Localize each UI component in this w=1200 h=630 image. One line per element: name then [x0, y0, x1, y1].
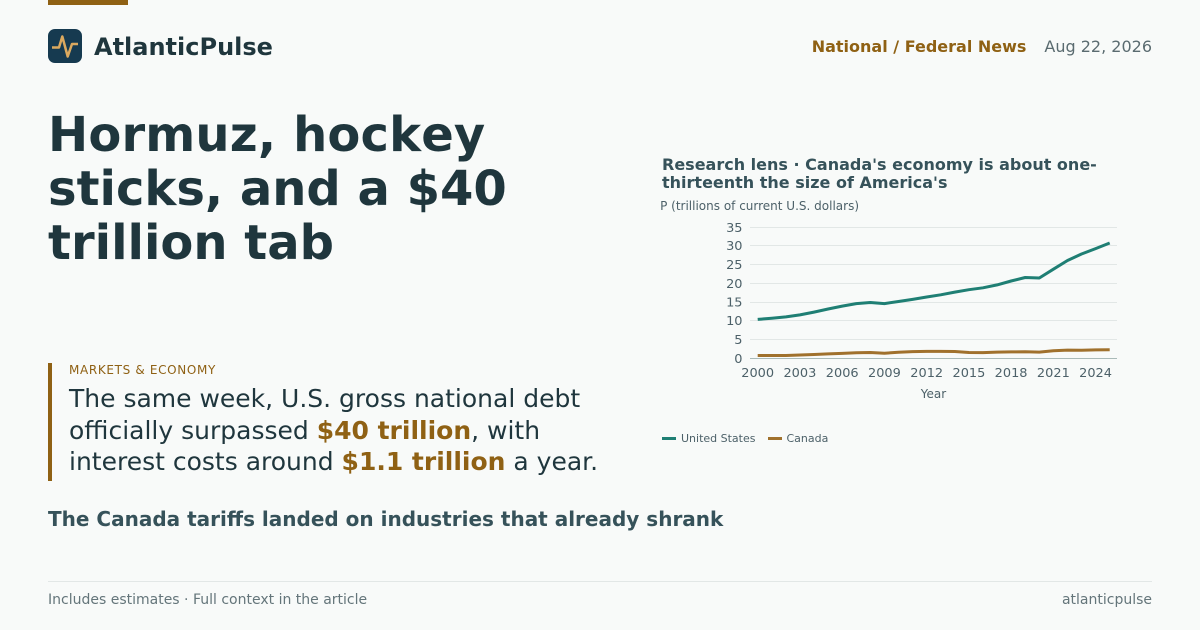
legend item: Canada [768, 432, 828, 445]
main headline: Hormuz, hockey [48, 107, 485, 163]
chart title: thirteenth the size of America's [662, 172, 947, 192]
x axis labels: 2018 [995, 365, 1028, 380]
x axis labels: 2009 [868, 365, 901, 380]
callout text: interest costs around $1.1 trillion a year. [69, 447, 598, 476]
brand logo icon [48, 29, 82, 63]
y axis labels: 35 [726, 220, 742, 235]
subheading: The Canada tariffs landed on industries that already shrank [48, 507, 723, 531]
x axis labels: 2006 [826, 365, 859, 380]
main headline: trillion tab [48, 215, 334, 271]
callout kicker: MARKETS & ECONOMY [69, 363, 216, 377]
top accent bar [48, 0, 128, 5]
callout text: officially surpassed $40 trillion, with [69, 416, 540, 444]
footer brand: atlanticpulse [1062, 592, 1152, 608]
x axis title: Year [920, 387, 946, 401]
legend [662, 432, 828, 445]
x axis labels: 2015 [953, 365, 985, 380]
section label and date: National / Federal News Aug 22, 2026 [812, 37, 1152, 56]
y axis labels: 5 [734, 332, 742, 347]
y axis labels: 15 [726, 295, 742, 309]
y axis labels [726, 220, 742, 366]
main headline [48, 107, 507, 271]
brand name: AtlanticPulse [94, 33, 273, 61]
y axis labels: 25 [726, 257, 742, 272]
x axis labels: 2012 [910, 365, 943, 380]
line chart [726, 220, 1117, 401]
chart title [662, 155, 1097, 192]
series: Canada [758, 350, 1110, 356]
y axis labels: 0 [734, 351, 742, 366]
main headline: sticks, and a $40 [48, 161, 507, 217]
y axis labels: 10 [726, 313, 742, 328]
callout: debt fact [48, 363, 612, 481]
footer divider [48, 581, 1152, 582]
legend item: United States: United States [681, 432, 756, 445]
callout text: The same week, U.S. gross national debt [69, 384, 580, 413]
y axis labels: 30 [726, 238, 742, 253]
x axis labels: 2021 [1037, 365, 1070, 380]
x axis labels [741, 365, 1112, 380]
x axis labels: 2003 [783, 365, 816, 380]
footer note: Includes estimates · Full context in the article [48, 592, 367, 608]
callout text [68, 384, 598, 476]
x axis labels: 2024 [1079, 365, 1112, 380]
y axis labels: 20 [726, 276, 742, 291]
chart title: Research lens · Canada's economy is about one- [662, 155, 1097, 174]
legend item: Canada: Canada [786, 432, 828, 445]
x axis labels: 2000 [741, 365, 774, 380]
series: United States [758, 243, 1110, 319]
